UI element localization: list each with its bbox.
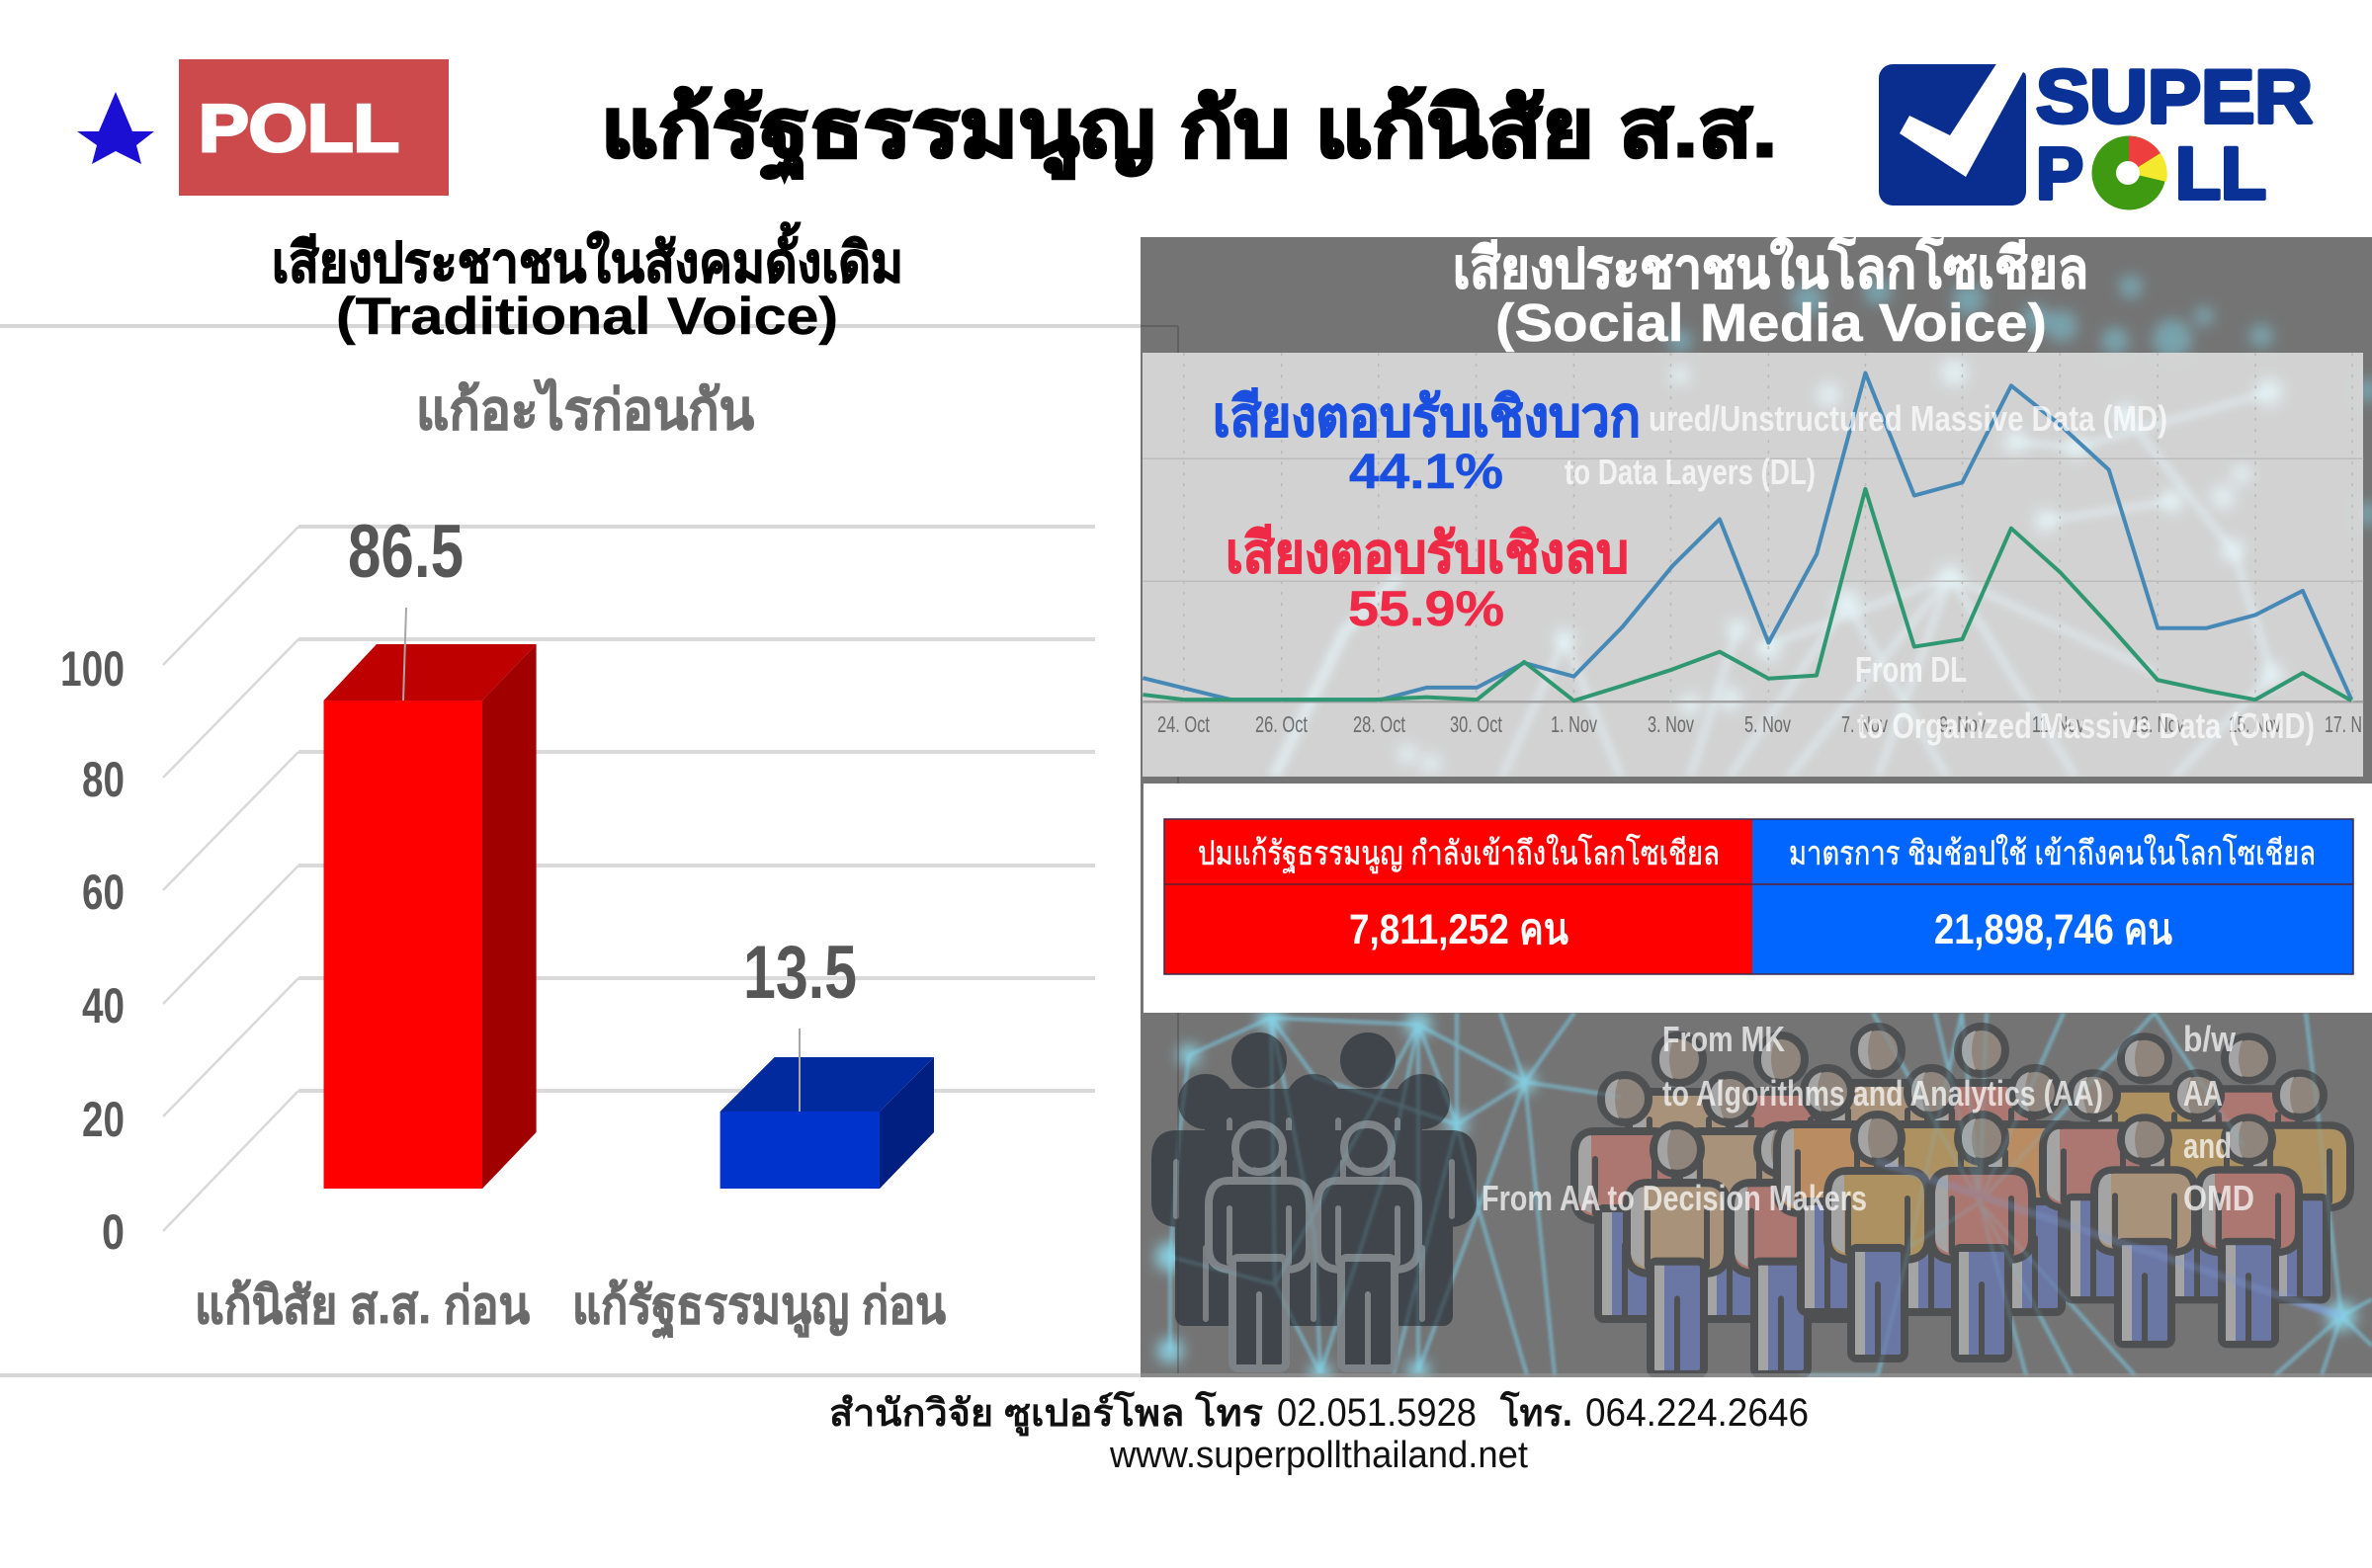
network background, upper band: [1668, 275, 2372, 526]
bottom edge strip: [1141, 1373, 2372, 1377]
overlay labels in lower panel: [1482, 1019, 2254, 1218]
heading: traditional voice: (Traditional Voice): [336, 288, 838, 346]
overlay labels in chart: [1565, 398, 2315, 746]
x axis dates: 13. Nov: [2132, 711, 2184, 737]
bar chart: what to fix first: [60, 510, 1095, 1339]
badge: POLL: POLL: [199, 91, 399, 166]
network overlay over people: [1170, 1013, 2372, 1375]
icon: blue star: [77, 92, 154, 164]
overlay labels in lower panel: and: [2183, 1125, 2232, 1166]
x axis dates: 9. Nov: [1939, 711, 1986, 737]
logo: Super Poll: LL: [2175, 132, 2266, 214]
category: fix constitution first: แก้รัฐธรรมนูญ ก่อน: [572, 1278, 946, 1339]
logo: Super Poll: P: [2036, 132, 2083, 214]
logo: Super Poll: SUPER: [2036, 55, 2313, 139]
overlay labels in chart: ured/Unstructured Massive Data (MD): [1649, 398, 2167, 439]
axis labels: 40: [82, 978, 125, 1033]
heading: traditional voice: เสียงประชาชนในสังคมดั้งเดิม: [272, 222, 903, 293]
x axis dates: 5. Nov: [1744, 711, 1791, 737]
overlay labels in chart: From DL: [1855, 649, 1967, 690]
heading: social media voice: เสียงประชาชนในโลกโซเชียล: [1453, 236, 2088, 299]
overlay labels in lower panel: to Algorithms and Analytics (AA): [1662, 1073, 2103, 1114]
overlay labels in lower panel: From AA to Decision Makers: [1482, 1178, 1867, 1218]
overlay labels in lower panel: OMD: [2183, 1178, 2254, 1218]
axis labels: 0: [102, 1204, 125, 1260]
bar: fix MP habits, red: [324, 644, 537, 1189]
heading: social media voice: [1453, 236, 2088, 353]
overlay labels in lower panel: From MK: [1662, 1019, 1785, 1059]
x axis dates: 24. Oct: [1157, 711, 1210, 737]
group: coloured people left: [1574, 1035, 1883, 1374]
chart title: แก้อะไรก่อนกัน: [416, 377, 754, 441]
network background, lower panel: [1170, 1013, 2372, 1375]
callout: positive response: 44.1%: [1349, 444, 1503, 499]
footer: contact: สำนักวิจัย ซูเปอร์โพล โทร: [829, 1390, 1264, 1437]
title: แก้รัฐธรรมนูญ กับ แก้นิสัย ส.ส.: [601, 84, 1777, 182]
axis labels: 20: [82, 1092, 125, 1147]
chart frame lines: [0, 324, 1181, 1377]
logo: Super Poll: [1879, 55, 2313, 214]
x axis dates: 28. Oct: [1353, 711, 1405, 737]
category: fix MP habits first: แก้นิสัย ส.ส. ก่อน: [195, 1278, 530, 1335]
panel: reach table background: [1144, 784, 2372, 1013]
group: coloured people centre: [1777, 1027, 2085, 1359]
footer: contact: 02.051.5928: [1277, 1391, 1477, 1435]
callout: positive response: เสียงตอบรับเชิงบวก: [1213, 385, 1641, 448]
cell: constitution reach label: ปมแก้รัฐธรรมนูญ กำลังเข้าถึงในโลกโซเชียล: [1198, 834, 1720, 873]
axis labels: 80: [82, 752, 125, 807]
heading: traditional voice: [272, 222, 903, 346]
group: dark people: [1155, 1036, 1473, 1368]
x axis dates: 30. Oct: [1450, 711, 1502, 737]
group: coloured people right: [2043, 1036, 2350, 1345]
panel lower overlay: people groups: [1155, 1027, 2350, 1374]
x axis dates: 3. Nov: [1648, 711, 1694, 737]
overlay labels in lower panel: b/w: [2183, 1019, 2237, 1059]
bar: fix constitution, blue: [720, 1057, 934, 1189]
heading: social media voice: (Social Media Voice): [1495, 293, 2047, 353]
panel: light chart background: [1143, 353, 2363, 777]
callout: negative response: เสียงตอบรับเชิงลบ: [1226, 522, 1629, 584]
axis labels: 100: [60, 641, 125, 697]
panel: social media voice: [1141, 237, 2372, 1384]
callout: negative response: [1226, 522, 1629, 636]
badge: POLL: [179, 59, 449, 196]
x axis dates: 15. Nov: [2229, 711, 2281, 737]
footer: contact: โทร.: [1499, 1390, 1572, 1435]
overlay labels in chart: to Data Layers (DL): [1565, 452, 1816, 492]
callout: positive response: [1213, 385, 1641, 499]
axis labels: 60: [82, 865, 125, 920]
footer: contact: [829, 1390, 1809, 1476]
line chart: social media trend: [1143, 353, 2363, 746]
callout: negative response: 55.9%: [1348, 581, 1504, 636]
overlay labels in lower panel: AA: [2183, 1073, 2223, 1114]
x axis dates: 1. Nov: [1551, 711, 1597, 737]
axis labels: [60, 641, 125, 1260]
x axis dates: 11. Nov: [2032, 711, 2084, 737]
leader lines: [403, 608, 800, 1112]
footer: contact: www.superpollthailand.net: [1109, 1435, 1528, 1476]
value: 86.5: 86.5: [348, 510, 464, 594]
x axis dates: [1157, 711, 2362, 737]
footer: contact: 064.224.2646: [1585, 1391, 1809, 1435]
cell: constitution reach number: 7,811,252 คน: [1349, 906, 1569, 953]
table: social media reach: [1164, 819, 2353, 974]
x axis dates: 26. Oct: [1255, 711, 1308, 737]
x axis dates: 7. Nov: [1841, 711, 1888, 737]
cell: shopping scheme reach number: 21,898,746 คน: [1934, 906, 2173, 953]
faint frame lines on panel: [1141, 325, 1179, 1373]
network showing through chart panel: [1274, 359, 2284, 777]
value: 13.5: 13.5: [743, 931, 857, 1015]
